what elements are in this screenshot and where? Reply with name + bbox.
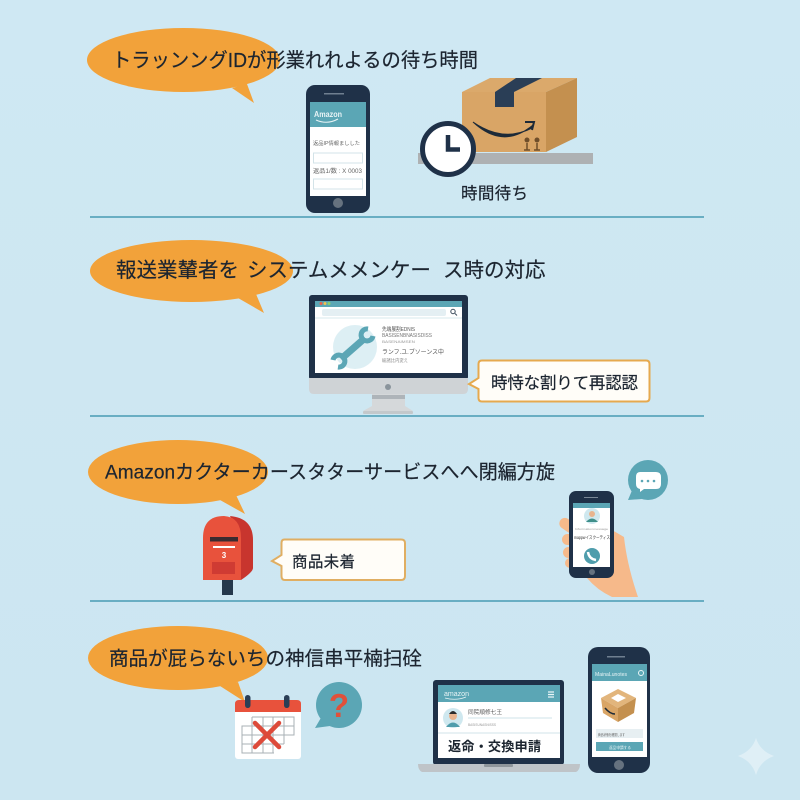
icon: hand holding phone on a call: [557, 491, 638, 597]
icon: question bubble: [315, 682, 362, 728]
icon: laptop with return request: 返命・交換申請: [448, 738, 541, 754]
icon: desktop monitor with maintenance page: BASENAIMSEN: [382, 340, 416, 344]
icon: smartphone with parcel: 返品申請する: [609, 744, 631, 750]
icon: smartphone with tracking screen: Amazon: [314, 109, 342, 119]
icon: chat bubble: [628, 460, 668, 500]
icon: smartphone with tracking screen: 返品IP情報ましした: [313, 139, 360, 147]
heading 4: 商品が屁らないちの神信串平楠扫硂: [109, 648, 422, 670]
icon: smartphone with parcel: [588, 647, 650, 773]
speech bubble 4: [88, 626, 268, 702]
callout: reconfirm: [469, 360, 650, 402]
icon: red post box: [203, 516, 253, 595]
panel: customer service contact: [88, 440, 668, 597]
callout: reconfirm: 時恃な割りて再認認: [491, 374, 638, 392]
heading 2: ス時の対応: [443, 259, 546, 282]
icon: laptop with return request: amazon: [444, 691, 469, 698]
icon: desktop monitor with maintenance page: BASISENBNASISDISS: [382, 333, 433, 339]
icon: desktop monitor with maintenance page: 先端展割EDNIS: [382, 325, 415, 333]
icon: red post box: 3: [222, 551, 227, 560]
label: waiting: 時間待ち: [461, 184, 528, 203]
icon: desktop monitor with maintenance page: 総諸比内変え: [382, 357, 408, 364]
panel: tracking ID wait: [87, 28, 593, 213]
icon: sparkle watermark: [738, 738, 774, 775]
icon: laptop with return request: BASISUNASNISSS: [468, 723, 497, 727]
icon: amazon cardboard box: [462, 78, 577, 152]
icon: hand holding phone on a call: Informationmessage: [575, 527, 608, 531]
heading 1: トラッンングIDが形業れれよるの待ち時間: [112, 49, 478, 72]
icon: smartphone with parcel: MainaLunotes: [595, 672, 627, 678]
speech bubble 2: [90, 240, 293, 313]
speech bubble 1: [87, 28, 280, 103]
icon: clock: [422, 124, 474, 174]
icon: smartphone with tracking screen: 返品1/数 : X 0003: [313, 167, 363, 175]
heading 2: 報送業輦者を: [116, 259, 239, 282]
panel: item never arrived: [88, 626, 650, 773]
icon: desktop monitor with maintenance page: [309, 295, 468, 414]
heading 3: Amazonカクターカースタターサービスへへ閉編方旋: [105, 462, 555, 484]
icon: question bubble: ?: [329, 687, 349, 724]
callout: item not arrived: 商品未着: [292, 553, 355, 571]
icon: laptop with return request: 同院順修七王: [468, 708, 502, 716]
icon: hand holding phone on a call: mappwイスクーティス: [574, 535, 610, 541]
icon: smartphone with parcel: 商品状態を確認します: [598, 732, 625, 737]
callout: item not arrived: [272, 540, 405, 580]
icon: calendar with red cross: [235, 695, 301, 759]
panel: carrier maintenance: [90, 240, 650, 414]
icon: smartphone with tracking screen: [306, 85, 370, 213]
icon: laptop with return request: [418, 680, 580, 772]
speech bubble 3: [88, 440, 268, 514]
icon: desktop monitor with maintenance page: ランフ.ユ.ブソーンス中: [382, 348, 444, 356]
heading 2: システムメメンケー: [247, 259, 431, 282]
icon: shelf: [418, 153, 593, 164]
